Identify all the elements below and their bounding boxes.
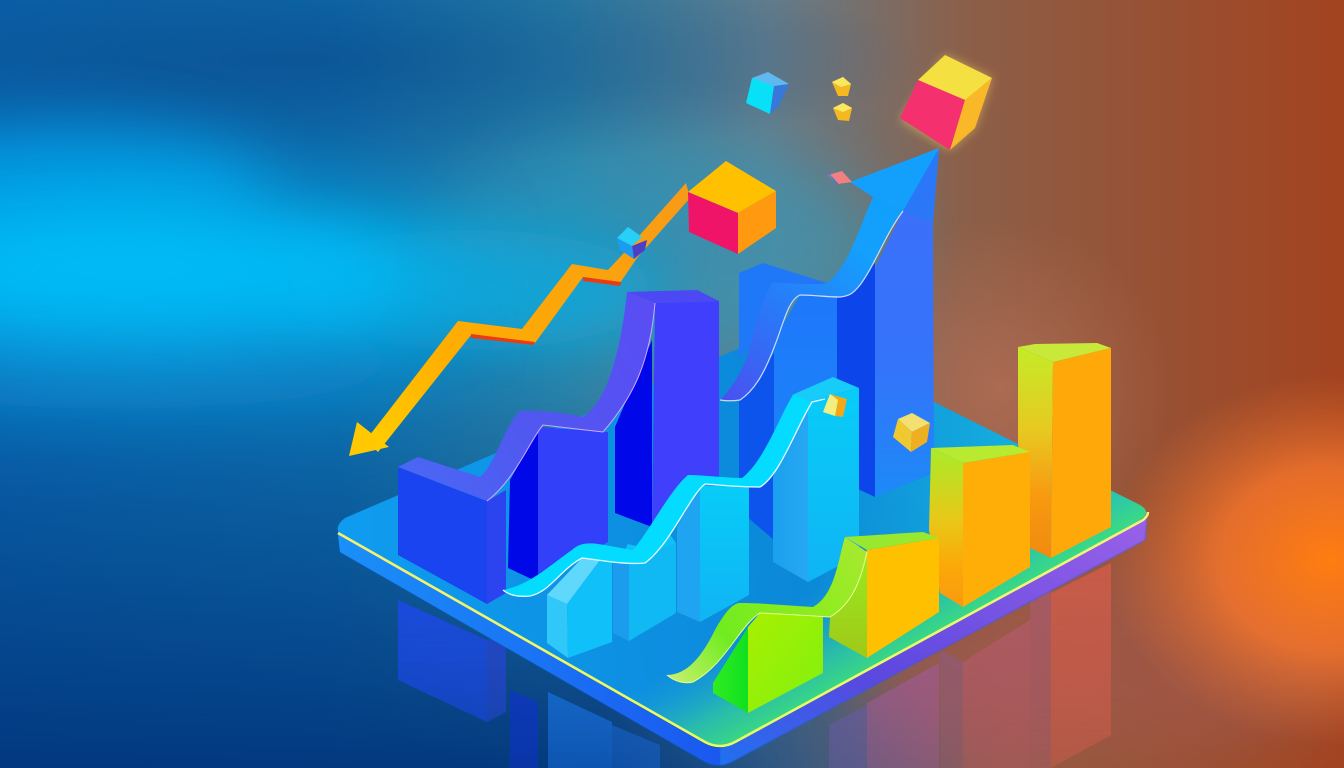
reflection of bars — [398, 563, 1111, 768]
platform glowing rim — [338, 512, 1148, 746]
green ribbon — [667, 537, 867, 683]
bar 2 dark side — [508, 430, 538, 582]
platform underside — [338, 518, 1147, 765]
small yellow cubes — [832, 77, 852, 121]
small cube on orange line — [617, 227, 647, 259]
bar 12 left — [1018, 347, 1053, 558]
bar 10 top — [845, 532, 939, 550]
bar 3 dark side — [615, 340, 652, 527]
bar 6 left — [677, 485, 700, 622]
arrow head — [349, 422, 389, 456]
platform — [338, 328, 1148, 765]
mid bar dark side — [739, 353, 774, 540]
blue ribbon — [720, 197, 903, 401]
arrow head — [850, 148, 939, 223]
bar 11 top — [931, 445, 1030, 463]
green and orange bar group — [667, 343, 1111, 713]
cyan bar group — [503, 377, 859, 658]
bar 6 front — [700, 485, 749, 622]
bar 9 left — [713, 627, 748, 713]
bar 10 left — [829, 550, 867, 658]
bar 7 left — [773, 402, 808, 582]
bar 1 right — [487, 490, 506, 604]
mid bar top and side — [739, 263, 848, 360]
bar 12 front — [1051, 348, 1111, 558]
tall bar dark side — [837, 263, 875, 497]
bar 9 front — [748, 613, 823, 713]
cube: orange and pink — [688, 161, 776, 254]
purple-blue bar group — [398, 290, 719, 604]
cyan ribbon — [503, 395, 812, 596]
bar 2 front — [538, 427, 608, 582]
bar 12 top — [1018, 343, 1111, 362]
tall blue bar with arrow — [720, 148, 939, 540]
bar 3 front — [652, 301, 719, 527]
cube: pink and yellow, top — [900, 55, 992, 150]
mid bar front — [774, 295, 837, 540]
bar 11 left — [929, 448, 963, 607]
bar 1 front — [398, 467, 487, 604]
orange descending arrow — [349, 183, 690, 456]
bar 7 front — [808, 388, 859, 582]
yellow cube floating — [893, 413, 930, 452]
bar 4 — [547, 595, 568, 658]
bar 3 top — [627, 290, 719, 303]
small pink fragment — [828, 171, 852, 184]
small yellow cube near bar — [823, 394, 847, 417]
platform top surface — [338, 328, 1146, 746]
bar 11 front — [963, 452, 1030, 607]
purple ribbon — [398, 292, 655, 501]
cube: cyan, top — [746, 72, 789, 114]
tall bar front — [875, 211, 934, 497]
bar 7 top — [792, 377, 859, 402]
bar 5 — [613, 557, 629, 641]
bar 10 front — [867, 538, 939, 658]
